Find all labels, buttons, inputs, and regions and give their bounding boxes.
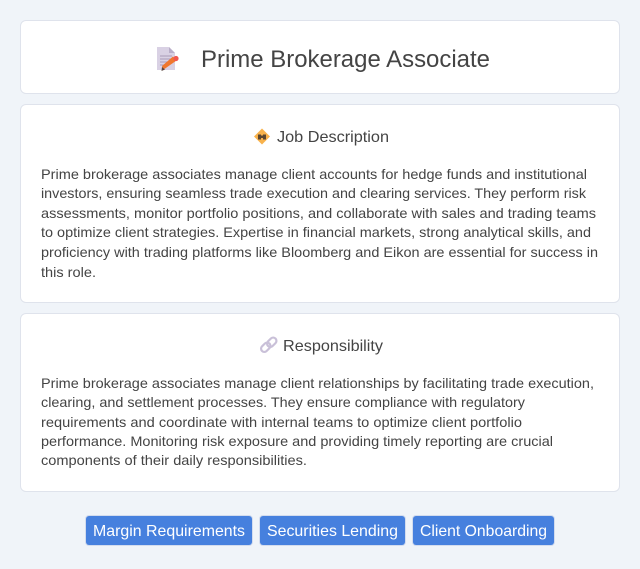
tag background: Securities Lending <box>260 516 405 545</box>
tag: Client Onboarding: Client Onboarding <box>420 523 547 540</box>
text block: job description: investors, ensuring seamless trade execution and clearing services. They perform risk <box>41 185 587 201</box>
text block: responsibility: performance. Monitoring risk exposure and providing timely reporting are crucial <box>41 433 553 449</box>
heading: Responsibility: Responsibility <box>283 338 383 355</box>
tag: Margin Requirements: Margin Requirements <box>93 523 245 540</box>
text block: responsibility: requirements and coordinate with internal teams to optimize client portfolio <box>41 414 522 430</box>
text block: job description <box>41 166 598 280</box>
text block: job description: Prime brokerage associates manage client accounts for hedge funds and institutional <box>41 166 587 182</box>
title: Prime Brokerage Associate <box>201 46 490 73</box>
panel: job description card <box>20 104 620 303</box>
tag background: Client Onboarding <box>413 516 554 545</box>
panel: title card <box>20 20 620 94</box>
icon: orange diamond <box>254 128 270 144</box>
heading: Job Description: Job Description <box>277 129 389 146</box>
text block: responsibility: clearing, and settlement processes. They ensure compliance with regulatory <box>41 394 525 410</box>
icon: document with pencil <box>157 47 179 71</box>
text block: job description: assessments, monitor portfolio positions, and collaborate with sales and trading teams <box>41 205 596 221</box>
icon: chain link <box>260 336 278 353</box>
text block: responsibility: Prime brokerage associates manage client relationships by facilitating trade execution, <box>41 375 594 391</box>
text block: job description: to optimize client strategies. Expertise in financial markets, strong analytical skills, and <box>41 224 591 240</box>
text block: job description: this role. <box>41 264 96 280</box>
text block: responsibility <box>41 375 594 468</box>
text block: responsibility: components of their daily responsibilities. <box>41 452 307 468</box>
panel: responsibility card <box>20 313 620 492</box>
tag: Securities Lending: Securities Lending <box>267 523 398 540</box>
tag background: Margin Requirements <box>86 516 252 545</box>
text block: job description: proficiency with trading platforms like Bloomberg and Eikon are essential for success in <box>41 244 598 260</box>
